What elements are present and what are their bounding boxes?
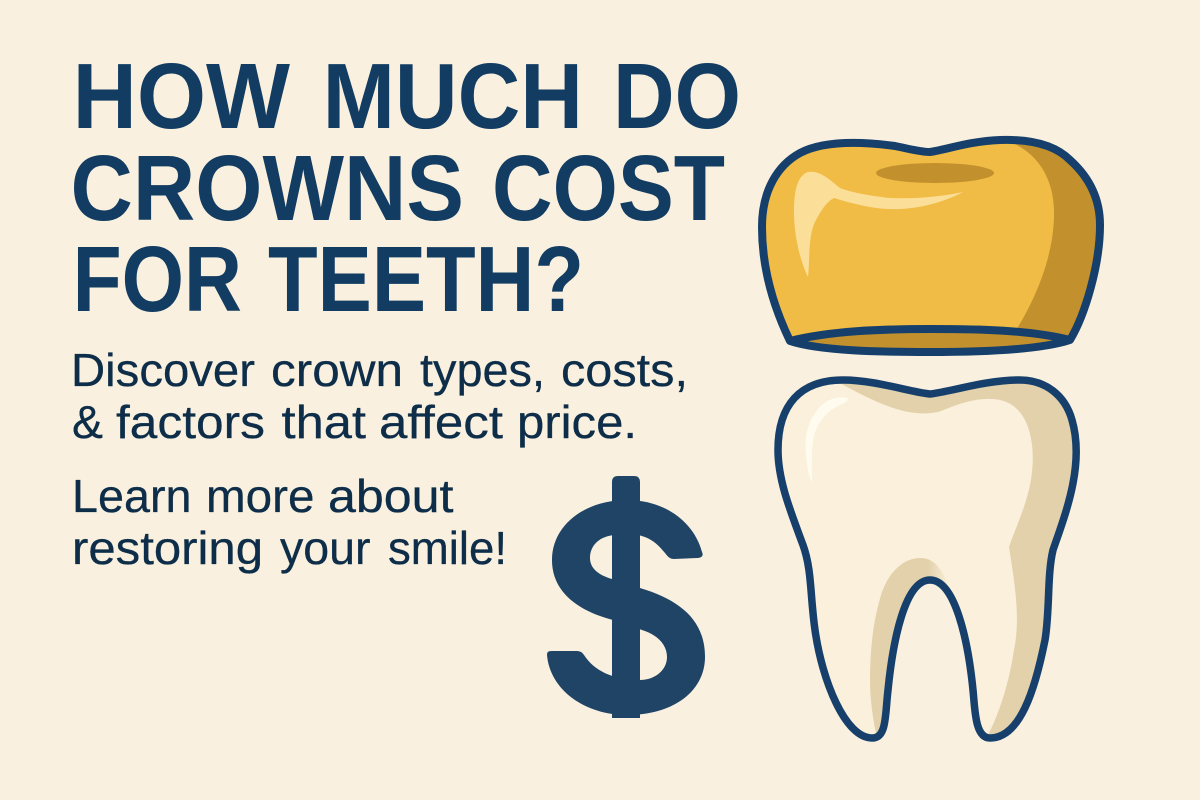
title: COST [492,136,725,240]
call to action text: Learn [72,470,192,522]
crown outline [762,140,1100,352]
infographic canvas [74,63,1104,742]
subtitle text: factors [116,396,265,448]
title [70,44,741,331]
crown side shading [1015,144,1096,336]
crown base opening [790,329,1070,352]
call to action text: about [328,470,454,522]
call to action text: your [280,522,370,574]
subtitle text: & [72,396,103,448]
tooth highlight [805,397,848,482]
tooth body [778,380,1076,738]
crown highlight [794,172,963,277]
title: FOR [73,227,242,331]
title: HOW [73,44,290,148]
icon: gold crown [762,130,1110,352]
crown top groove [876,163,994,183]
title: TEETH? [268,227,584,331]
subtitle text: crown [271,344,403,396]
icon: dollar sign [547,476,705,718]
call to action text: more [206,470,314,522]
title: DO [613,44,741,148]
call to action text: smile! [388,522,507,574]
subtitle text: costs, [561,344,688,396]
crown body [762,140,1100,341]
subtitle text: affect [379,396,503,448]
icon: tooth [778,370,1095,745]
title: MUCH [323,44,583,148]
title: CROWNS [70,136,464,240]
subtitle text: Discover [71,344,255,396]
tooth shading [841,384,1072,734]
subtitle text: types, [420,344,545,396]
subtitle text [71,344,688,448]
tooth root shading [870,558,950,738]
call to action text: restoring [72,522,263,574]
subtitle text: that [282,396,366,448]
tooth outline [778,380,1076,738]
call to action text [72,470,507,574]
subtitle text: price. [517,396,637,448]
